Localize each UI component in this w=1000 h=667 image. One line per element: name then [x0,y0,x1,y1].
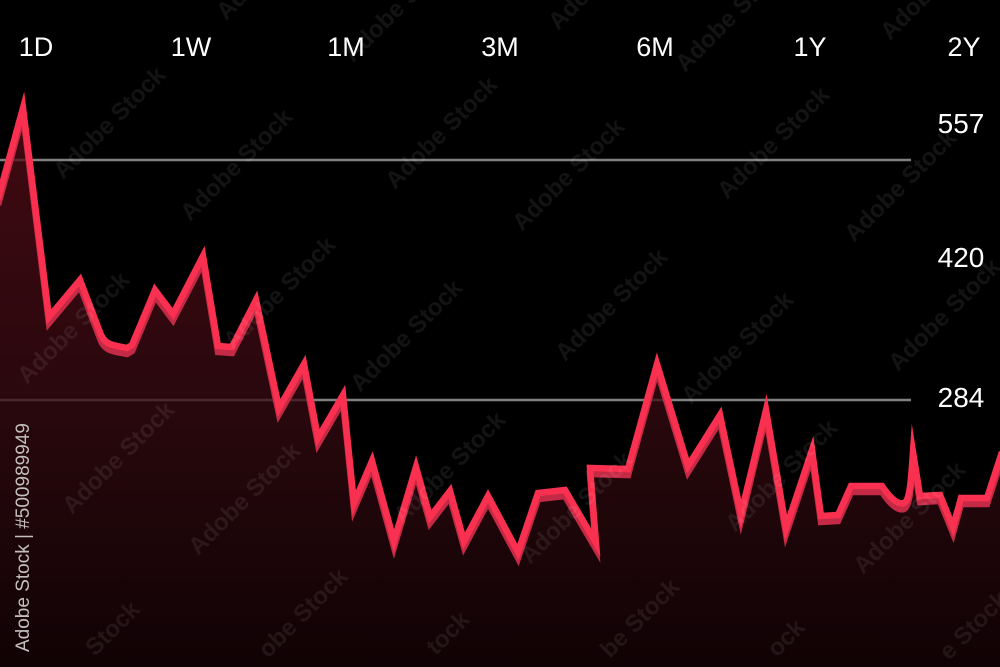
stock watermarks: Adobe Stock [218,231,341,354]
price line [0,108,1000,558]
stock watermarks: Adobe Stock [720,414,843,537]
stock watermarks: Adobe Stock [12,266,135,389]
value: 557: 557 [938,108,984,139]
stock watermarks: Adobe Stock [839,124,962,247]
stock watermarks: Adobe Stock [57,396,180,519]
stock watermarks: Adobe Stock [515,446,638,569]
label: 1M: 1M [327,32,365,62]
time range labels [19,32,981,62]
stock watermarks: obe Stock [253,563,354,663]
stock watermarks: Adobe Stock [380,71,503,194]
stock watermarks: Adobe Stock [183,437,306,560]
gridline: 557 level [0,159,911,161]
stock watermarks: tock [421,606,476,660]
label: 2Y: 2Y [947,32,981,62]
label: 1Y: 1Y [793,32,827,62]
stock watermarks: Adobe Stock [388,406,511,529]
price line: bright stroke [0,108,1000,552]
stock watermarks: ock [762,613,811,662]
label: 1D: 1D [19,32,53,62]
label: 6M: 6M [636,32,674,62]
vertical image id text: Adobe Stock | #500989949 [13,423,34,652]
value: 420: 420 [938,242,984,273]
stock watermarks: Adobe Stock [175,103,298,226]
stock watermarks: Adobe Stock [712,81,835,204]
label: 3M: 3M [481,32,519,62]
stock watermarks: Adobe Stock [48,61,171,184]
price line: dark under-stroke [0,114,1000,558]
stock watermarks: Adobe Stock [507,113,630,236]
stock watermarks: Adobe Stock [848,456,971,579]
gridline: 284 level [0,399,911,401]
stock watermarks: Adobe Stock [550,243,673,366]
label: 1W: 1W [171,32,212,62]
stock watermarks: Stock [80,595,146,661]
price axis labels [938,108,984,413]
value: 284: 284 [938,382,984,413]
stock watermarks: Adobe Stock [676,286,799,409]
stock watermarks: Adobe Stock [345,274,468,397]
stock watermarks: be Stock [595,573,685,663]
